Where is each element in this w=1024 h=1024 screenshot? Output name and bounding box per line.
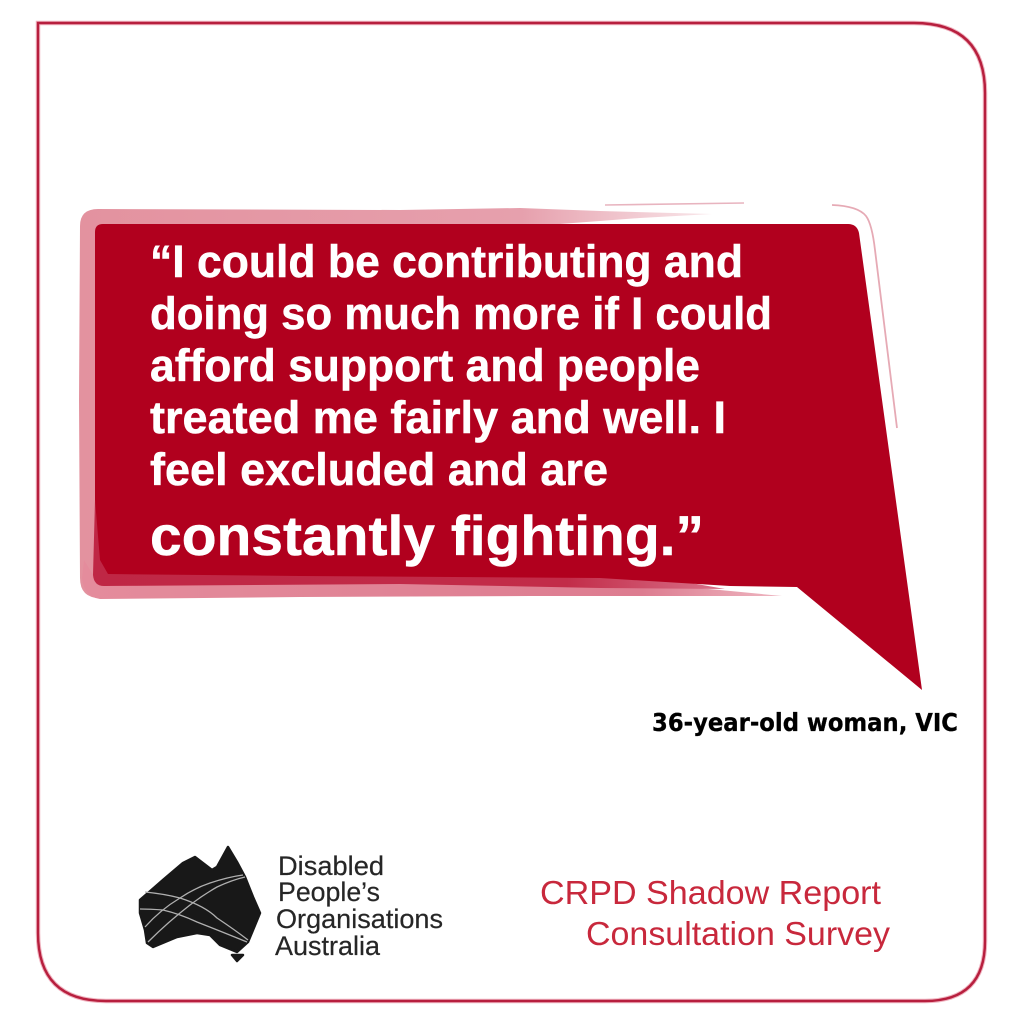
quote text [150,236,772,567]
survey title line 2: Consultation Survey [586,915,891,952]
survey title line 1: CRPD Shadow Report [540,874,881,911]
survey title [540,874,891,952]
wordmark line 2: People’s [278,877,380,907]
logo wordmark [275,851,443,961]
wordmark line 4: Australia [275,931,381,961]
logo: Disabled People's Organisations Australia [140,847,443,961]
quote line 4: treated me fairly and well. I [150,392,726,443]
icon: Australia map [140,847,260,961]
quote line 5: feel excluded and are [150,444,608,495]
bubble: thin top brush stroke [605,203,744,205]
quote emphasised line: constantly fighting.” [150,504,704,567]
quote line 1: “I could be contributing and [150,236,743,287]
bubble: pale lower brush layer [82,560,782,599]
bubble: top right brush stroke [832,205,897,428]
quote line 2: doing so much more if I could [150,288,772,339]
speech bubble [79,203,922,690]
wordmark line 3: Organisations [276,904,443,934]
bubble: pale brush top and left layer [79,208,712,598]
attribution: 36-year-old woman, VIC [652,708,958,737]
bubble: mid red lower band [93,500,725,589]
wordmark line 1: Disabled [278,851,384,881]
bubble: main red shape [95,224,922,690]
quote line 3: afford support and people [150,340,700,391]
